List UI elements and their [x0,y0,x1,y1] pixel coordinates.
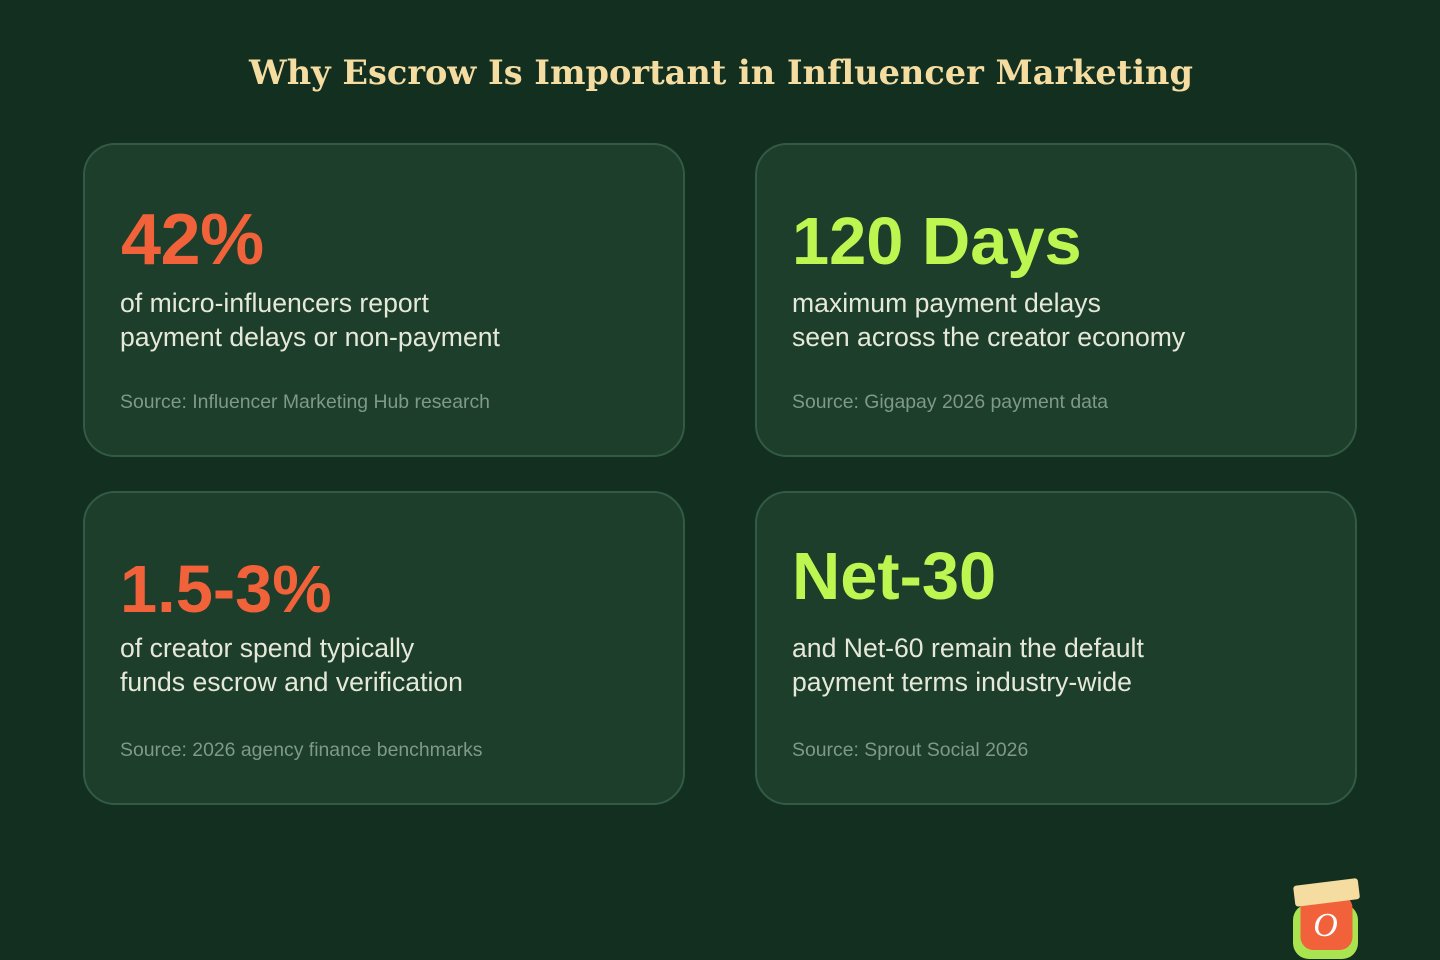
description: seen across the creator economy [792,322,1185,352]
panel: 120 Days stat [755,143,1357,457]
jar lid [1293,878,1360,907]
panel: 42% stat [83,143,685,457]
source: Source: 2026 agency finance benchmarks [120,739,482,761]
description: maximum payment delays [792,288,1101,318]
description: of micro-influencers report [120,288,429,318]
statistic: 1.5-3%: 1.5-3% [120,553,332,627]
description: payment terms industry-wide [792,667,1132,697]
description [120,288,500,352]
jar label [1300,895,1352,950]
statistic: 120 Days: 120 Days [792,205,1082,279]
description [792,633,1144,697]
panel: Net-30 stat [755,491,1357,805]
description [120,633,463,697]
description: funds escrow and verification [120,667,463,697]
title: Why Escrow Is Important in Influencer Marketing [249,52,1193,92]
jar body [1293,904,1358,959]
letter O: O [1313,907,1338,944]
icon: jar logo [1293,878,1360,959]
source: Source: Gigapay 2026 payment data [792,391,1108,413]
source: Source: Influencer Marketing Hub research [120,391,490,413]
description: of creator spend typically [120,633,414,663]
description [792,288,1186,352]
statistic: 42%: 42% [121,200,264,280]
source: Source: Sprout Social 2026 [792,739,1028,761]
description: and Net-60 remain the default [792,633,1144,663]
panel: 1.5-3% stat [83,491,685,805]
description: payment delays or non-payment [120,322,500,352]
statistic: Net-30: Net-30 [792,540,996,614]
